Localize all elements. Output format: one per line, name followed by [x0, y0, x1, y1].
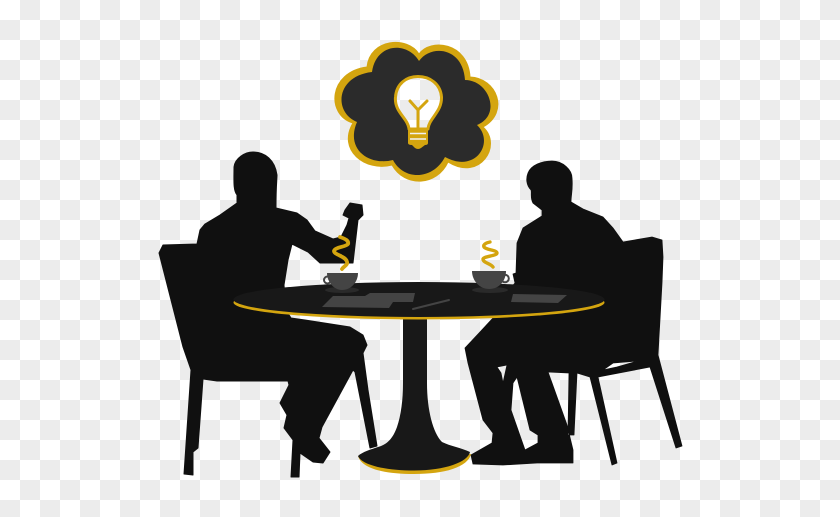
table pedestal and base [358, 315, 471, 474]
left steam [334, 237, 348, 269]
right man silhouette with chair [465, 161, 682, 465]
left coffee cup [324, 273, 359, 293]
left man silhouette with chair [159, 152, 377, 477]
pen [413, 300, 449, 309]
icon: light bulb [395, 76, 442, 149]
thought cloud with light bulb [335, 42, 498, 181]
table top [234, 282, 604, 320]
right coffee cup [472, 271, 509, 293]
right steam [483, 242, 497, 267]
paper: left stacked sheets [322, 293, 415, 308]
paper: right sheet [511, 294, 567, 303]
